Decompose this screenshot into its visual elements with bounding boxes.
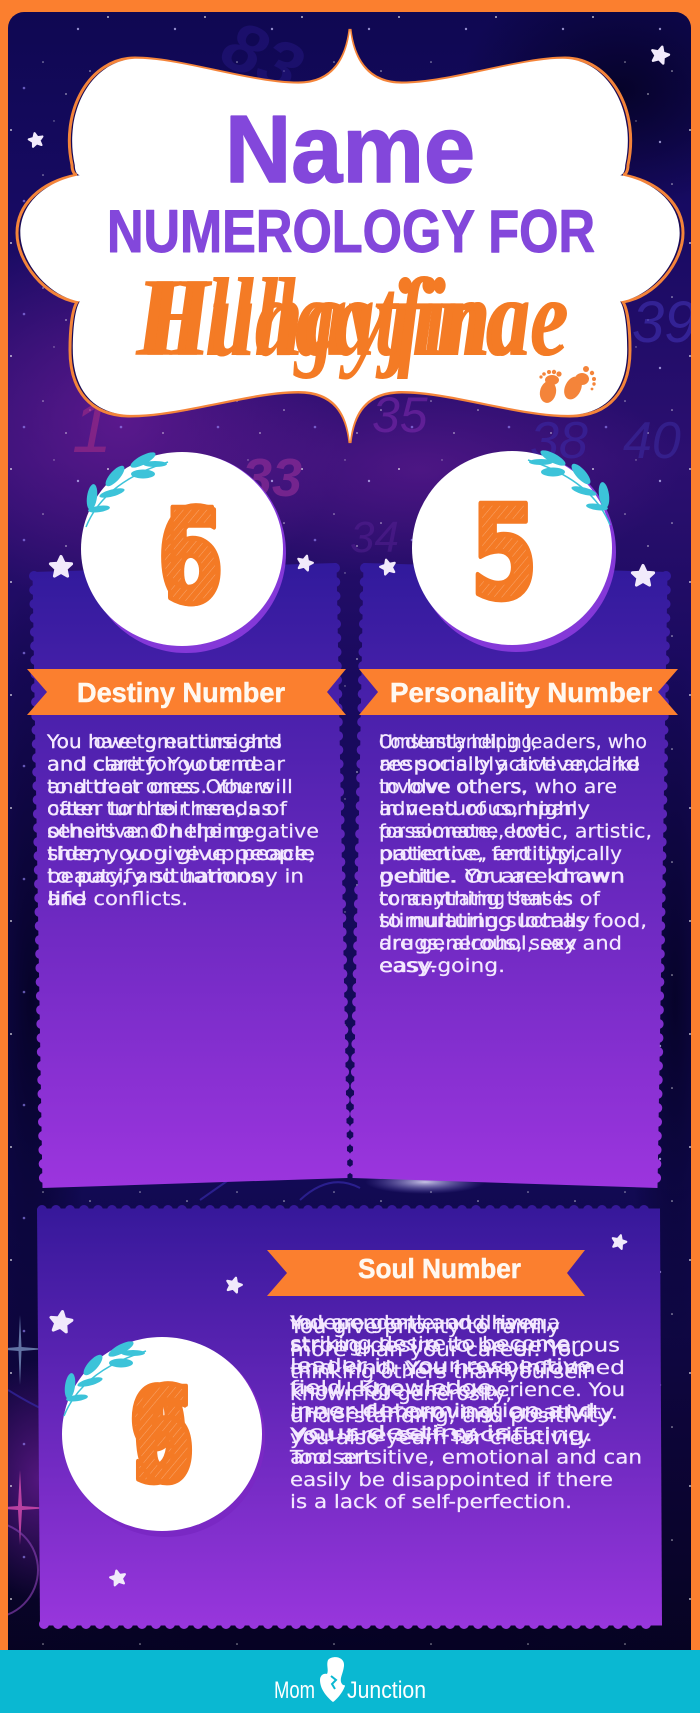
text block: personality description: are socially active and like: [379, 753, 640, 775]
title: Name: Name: [225, 96, 475, 203]
text block: destiny description: and dear ones. You will: [47, 776, 293, 798]
text block: soul description: you also yearn for creativity: [290, 1427, 590, 1449]
text block: destiny description: beauty, and harmony in: [47, 865, 304, 887]
text block: soul description: easily be disappointed if there: [290, 1469, 613, 1491]
text block: soul description: striking desire to become: [290, 1333, 570, 1355]
logo: MomJunction: Mom: [274, 1677, 315, 1704]
text block: destiny description: to attract ones. Others: [47, 776, 272, 798]
circle: destiny number 6: [81, 452, 286, 653]
faint background numbers: 83: [211, 5, 314, 109]
footer bar: [0, 1650, 700, 1713]
text block: personality description: drugs, alcohol, sex and: [379, 933, 622, 955]
title: Numerology for: NUMEROLOGY FOR: [107, 198, 595, 265]
text block: destiny description: and care for your near: [47, 753, 285, 775]
overlaid digits: 6: [132, 1359, 194, 1511]
text block: destiny description: and conflicts.: [47, 888, 188, 910]
panel: soul: [37, 1208, 662, 1626]
text block: destiny description: You have great insights: [46, 731, 282, 753]
text block: soul description: You are self-sacrificing.: [289, 1424, 593, 1446]
faint background numbers: 39: [632, 290, 697, 355]
text block: soul description: thinking others than yourself: [290, 1361, 591, 1383]
text block: destiny description: [46, 731, 319, 910]
logo: MomJunction: Junction: [347, 1677, 426, 1704]
text block: personality description: Understanding leaders, who: [379, 731, 647, 753]
text block: personality description: patience, fertility,: [379, 843, 580, 865]
faint background numbers: 35: [372, 387, 428, 443]
text block: personality description: responsibly active, and: [379, 753, 640, 775]
text block: soul description: known for generosity,: [290, 1383, 512, 1405]
text block: personality description: easy.: [379, 955, 437, 977]
ribbon: personality number: Personality Number: [390, 677, 652, 708]
text block: destiny description: cater to their needs of: [47, 798, 288, 820]
text block: soul description: more than your career. You: [290, 1339, 585, 1361]
faint background numbers: 40: [623, 412, 681, 470]
overlaid digits: 5: [142, 1360, 196, 1512]
text block: personality description: passionate, erotic, artistic,: [379, 821, 652, 843]
ribbon: destiny number: [27, 669, 346, 715]
icon: personality leaf sprig: [528, 447, 611, 525]
text block: destiny description: others and helping: [47, 821, 250, 843]
text block: personality description: are generous, sexy: [379, 933, 577, 955]
title plaque: [17, 29, 683, 443]
panel: personality: [352, 563, 668, 1188]
text block: soul description: is a lack of self-perfection.: [290, 1491, 572, 1513]
text block: personality description: to love others, who are: [379, 776, 617, 798]
icon: destiny leaf sprig: [85, 449, 168, 527]
faint background numbers: 33: [242, 448, 302, 508]
circle: personality number 5: [412, 451, 616, 652]
faint background numbers: 1: [72, 388, 112, 468]
text block: soul description: knowledge and experience. You: [290, 1379, 625, 1401]
text block: soul description: Independent and driven,: [290, 1312, 552, 1334]
text block: soul description: and kind. You have informed: [290, 1357, 625, 1379]
text block: personality description: to nurturing locally: [379, 910, 590, 932]
text block: personality description: involve others.: [379, 776, 527, 798]
icon: baby feet: [538, 366, 596, 404]
text block: personality description: stimulating such as food,: [379, 910, 647, 932]
text block: destiny description: them, you give people: [47, 843, 315, 865]
ribbon: personality number: [359, 669, 678, 715]
text block: personality description: easy-going.: [379, 955, 505, 977]
panel: destiny: [32, 563, 348, 1188]
overlaid digits: 9: [129, 1360, 189, 1512]
cosmic flares lower left: [0, 1165, 360, 1618]
text block: soul description: your destiny is: [290, 1422, 510, 1444]
logo: MomJunction: [274, 1657, 426, 1704]
text block: personality description: concentrating senses: [379, 888, 573, 910]
text block: soul description: leader in your respective: [290, 1355, 592, 1377]
faint background numbers: 34: [350, 513, 399, 562]
title: overlaid script names: Hllhayjinae: [135, 256, 569, 380]
text block: soul description: and art: [290, 1446, 372, 1468]
text block: soul description: inner determination and: [290, 1400, 595, 1422]
faint background numbers: [72, 5, 697, 562]
icon: soul leaf sprig: [63, 1338, 146, 1416]
ribbon: soul number: Soul Number: [358, 1253, 521, 1284]
text block: soul description: Too sensitive, emotional and can: [289, 1446, 642, 1468]
circle: soul number: [62, 1337, 265, 1537]
overlaid digits: 6: [157, 481, 224, 633]
text block: destiny description: often turn to them, as: [47, 798, 272, 820]
text block: destiny description: side, you give up peace,: [47, 843, 315, 865]
text block: destiny description: You love to nurture and: [46, 731, 282, 753]
text block: soul description: are self-improving, creativity.: [290, 1402, 618, 1424]
text block: personality description: gentle. You are drawn: [379, 865, 625, 887]
text block: personality description: protective, and typically: [379, 843, 622, 865]
text block: destiny description: sensitive. On the negative: [47, 821, 319, 843]
text block: personality description: for someone, love: [379, 821, 550, 843]
text block: soul description: strong desire to be generous: [290, 1334, 620, 1356]
ribbon: destiny number: Destiny Number: [77, 677, 285, 708]
text block: soul description: You give priority to family: [289, 1316, 560, 1338]
overlaid digits: 5: [163, 481, 223, 633]
text block: personality description: [379, 731, 652, 977]
text block: destiny description: to pacify situations: [47, 865, 262, 887]
text block: destiny description: life: [47, 888, 87, 910]
text block: soul description: understanding, and positivity: [290, 1405, 610, 1427]
text block: destiny description: and clarity. You tend: [47, 753, 257, 775]
text block: soul description: You are gentle, and have a: [289, 1312, 560, 1334]
ribbon: soul number: [267, 1250, 585, 1296]
text block: personality description: Constantly helping,: [379, 731, 537, 753]
text block: personality description: in need of company: [379, 798, 590, 820]
text block: soul description: field. Knowledge,: [290, 1377, 500, 1399]
text block: personality description: petite. Or are known: [379, 865, 625, 887]
text block: personality description: to anything that is of: [379, 888, 601, 910]
text block: personality description: adventurous, highly: [379, 798, 590, 820]
circle: personality number 5: 5: [470, 477, 538, 629]
faint background numbers: 38: [530, 412, 588, 470]
text block: soul description: [289, 1312, 642, 1513]
